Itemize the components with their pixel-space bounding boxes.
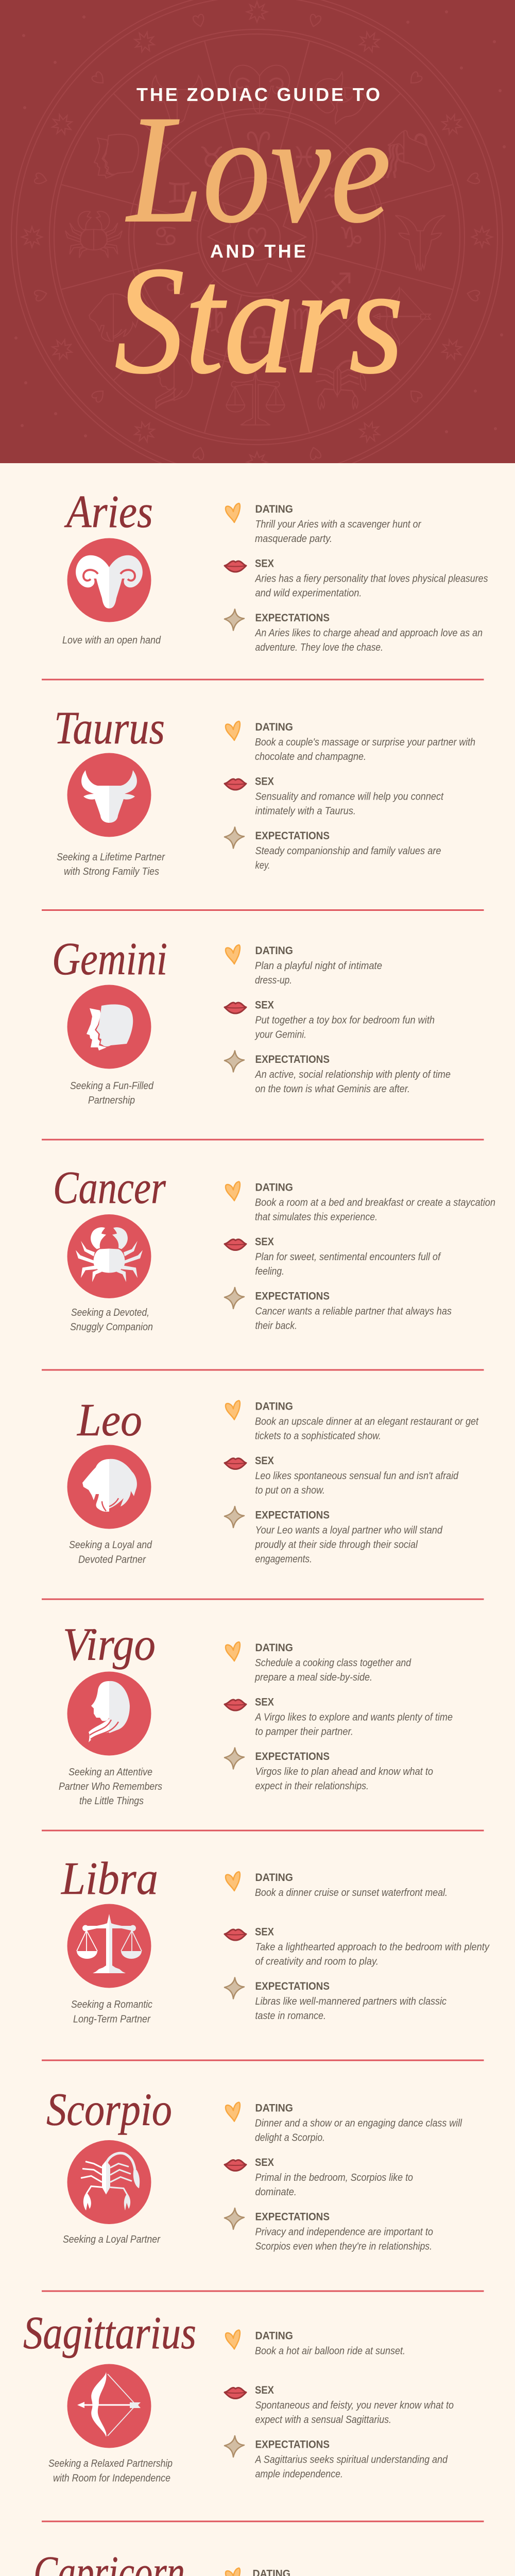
sex block: SEX (255, 1926, 274, 1938)
caption (70, 1307, 153, 1333)
expectations block: Cancer wants a reliable partner that always has (255, 1306, 452, 1317)
caption (71, 1998, 153, 2025)
dating block: Book a dinner cruise or sunset waterfront meal. (255, 1887, 448, 1899)
sex block (225, 2157, 413, 2198)
dating block: chocolate and champagne. (255, 751, 366, 762)
dating block: prepare a meal side-by-side. (254, 1671, 372, 1683)
expectations block: Steady companionship and family values are (255, 845, 441, 857)
caption: Seeking a Fun-Filled (70, 1080, 154, 1092)
dating block (226, 503, 422, 545)
caption: with Strong Family Ties (64, 866, 159, 877)
expectations block: taste in romance. (255, 2010, 326, 2022)
sex block (225, 1455, 459, 1496)
dating block: Book a couple's massage or surprise your partner with (255, 736, 475, 748)
panel: header: ♍ (199, 301, 225, 335)
expectations block: EXPECTATIONS (255, 1290, 330, 1302)
sign name: Gemini (52, 934, 167, 985)
expectations block: proudly at their side through their social (255, 1538, 418, 1551)
panel: header: ♒ (322, 177, 348, 210)
caption: Seeking a Relaxed Partnership (48, 2458, 173, 2469)
title word: Love: Love (125, 83, 391, 255)
sex block: your Gemini. (254, 1028, 306, 1041)
dating block: dress-up. (255, 974, 292, 986)
expectations block: their back. (255, 1320, 297, 1331)
dating block: DATING (255, 945, 293, 957)
caption: Seeking a Loyal Partner (63, 2233, 161, 2245)
sign name: Leo (76, 1395, 142, 1446)
expectations block: EXPECTATIONS (255, 1054, 330, 1065)
expectations block: EXPECTATIONS (255, 1510, 330, 1521)
caption: Snuggly Companion (70, 1321, 153, 1333)
sex block: Put together a toy box for bedroom fun with (255, 1014, 435, 1026)
panel: header: ♏ (291, 303, 317, 336)
expectations block: EXPECTATIONS (255, 1751, 330, 1762)
expectations block: expect in their relationships. (255, 1780, 369, 1792)
caption (57, 851, 165, 877)
caption: Long-Term Partner (73, 2013, 151, 2025)
caption: with Room for Independence (53, 2472, 170, 2484)
panel: Libra (60, 1853, 490, 2025)
dating block (226, 2102, 462, 2143)
sex block (225, 1926, 490, 1967)
panel: header: ♐ (327, 267, 353, 301)
sex block: SEX (255, 557, 274, 570)
panel: Taurus (54, 703, 475, 877)
expectations block (225, 1977, 447, 2022)
caption: Seeking a Romantic (71, 1998, 153, 2010)
sex block (225, 776, 444, 817)
dating block (226, 1872, 448, 1899)
panel: header: ♉ (199, 141, 225, 175)
caption (70, 1080, 154, 1106)
expectations block: EXPECTATIONS (255, 612, 330, 624)
dating block: that simulates this experience. (255, 1211, 377, 1223)
sign name: Cancer (53, 1162, 166, 1213)
icon: crab (67, 1214, 151, 1298)
dating block: DATING (255, 1182, 293, 1193)
sex block: SEX (255, 776, 274, 787)
panel: header: ♌ (163, 269, 188, 302)
expectations block (225, 827, 441, 871)
panel: Virgo (59, 1619, 453, 1807)
panel: Sagittarius (23, 2308, 454, 2484)
sign name: Libra (60, 1853, 158, 1904)
sex block: Plan for sweet, sentimental encounters full of (255, 1251, 441, 1263)
expectations block: EXPECTATIONS (255, 2211, 330, 2223)
expectations block: EXPECTATIONS (255, 1980, 330, 1992)
sex block: A Virgo likes to explore and wants plenty of time (254, 1711, 453, 1723)
sex block: feeling. (255, 1265, 284, 1277)
expectations block: An Aries likes to charge ahead and approach love as an (254, 627, 483, 639)
panel: header: ♓ (291, 141, 317, 175)
sex block (225, 557, 488, 599)
panel: header: ♈ (246, 126, 271, 160)
panel: header: ♋ (153, 220, 179, 253)
dating block: DATING (255, 1642, 293, 1654)
expectations block: Virgos like to plan ahead and know what to (255, 1766, 433, 1777)
sex block: SEX (255, 2157, 274, 2168)
expectations block: Privacy and independence are important to (255, 2226, 433, 2238)
sign name: Sagittarius (23, 2308, 196, 2359)
expectations block (225, 2208, 433, 2252)
icon: ram (67, 538, 151, 622)
panel: Cancer (53, 1162, 495, 1333)
caption: Partnership (88, 1094, 135, 1106)
dating block (226, 2568, 466, 2576)
caption: Partner Who Remembers (59, 1781, 162, 1792)
sex block: and wild experimentation. (255, 587, 362, 599)
sex block: dominate. (255, 2186, 297, 2198)
sex block: SEX (255, 1455, 274, 1467)
panel: header: ♊ (166, 177, 192, 210)
expectations block: key. (255, 859, 270, 871)
sex block (225, 1236, 441, 1277)
sex block: Sensuality and romance will help you connect (255, 790, 444, 803)
panel: header: ♑ (338, 221, 364, 255)
dating block: Thrill your Aries with a scavenger hunt or (255, 518, 422, 530)
expectations block: on the town is what Geminis are after. (255, 1083, 410, 1095)
caption: Seeking an Attentive (68, 1766, 152, 1778)
dating block: DATING (255, 2330, 293, 2342)
dating block: DATING (255, 2102, 293, 2114)
expectations block: adventure. They love the chase. (255, 641, 383, 653)
sex block: intimately with a Taurus. (255, 805, 356, 817)
icon: scorpion (67, 2140, 151, 2224)
panel: header: ♎ (247, 319, 272, 352)
sex block: Spontaneous and feisty, you never know what to (255, 2399, 454, 2411)
panel: Gemini (52, 934, 451, 1106)
panel: Leo (67, 1395, 479, 1565)
expectations block: ample independence. (255, 2468, 343, 2480)
dating block: DATING (255, 503, 293, 515)
caption: the Little Things (79, 1795, 144, 1807)
expectations block (225, 2436, 448, 2480)
caption (59, 1766, 162, 1807)
sign name: Virgo (63, 1619, 156, 1670)
caption (48, 2458, 173, 2484)
expectations block (225, 1287, 452, 1331)
sex block (225, 1696, 453, 1737)
expectations block: A Sagittarius seeks spiritual understanding and (254, 2453, 448, 2466)
sex block: Take a lighthearted approach to the bedroom with plenty (255, 1941, 490, 1953)
expectations block: Libras like well-mannered partners with classic (255, 1995, 447, 2007)
title line: and the: AND THE (210, 241, 306, 262)
icon: bow and arrow (67, 2364, 151, 2448)
dating block (226, 721, 475, 762)
panel: Capricorn (33, 2547, 472, 2576)
panel: Scorpio (46, 2084, 462, 2252)
sex block: expect with a sensual Sagittarius. (255, 2414, 391, 2426)
sex block: of creativity and room to play. (255, 1956, 379, 1967)
sex block: SEX (255, 999, 274, 1011)
sign name: Aries (64, 486, 153, 537)
expectations block: Your Leo wants a loyal partner who will stand (255, 1524, 443, 1536)
dating block: Schedule a cooking class together and (255, 1657, 411, 1669)
dating block (226, 2330, 405, 2357)
expectations block: EXPECTATIONS (255, 830, 330, 842)
dating block: Book an upscale dinner at an elegant restaurant or get (255, 1416, 479, 1427)
dating block (226, 945, 382, 986)
sex block: to pamper their partner. (255, 1726, 353, 1737)
expectations block: Scorpios even when they're in relationships. (255, 2240, 432, 2252)
icon: twins (67, 985, 151, 1069)
panel: Aries (62, 486, 488, 653)
dating block: Dinner and a show or an engaging dance class will (255, 2117, 462, 2129)
sex block: to put on a show. (255, 1484, 325, 1496)
sex block: Leo likes spontaneous sensual fun and isn't afraid (255, 1470, 459, 1482)
sex block: SEX (255, 1696, 274, 1708)
caption: Devoted Partner (78, 1554, 146, 1565)
sign name: Scorpio (46, 2084, 172, 2135)
caption (69, 1539, 152, 1565)
dating block (226, 1642, 411, 1683)
expectations block: engagements. (255, 1553, 312, 1565)
icon: lion (67, 1445, 151, 1529)
title line: the zodiac guide to: THE ZODIAC GUIDE TO (136, 84, 380, 105)
sex block (225, 2384, 454, 2426)
sex block: Aries has a fiery personality that loves physical pleasures (254, 573, 488, 584)
caption: Love with an open hand (62, 634, 161, 646)
dating block: tickets to a sophisticated show. (255, 1430, 381, 1442)
expectations block (225, 1506, 443, 1565)
expectations block (225, 609, 483, 653)
sex block (225, 999, 435, 1041)
dating block (226, 1400, 479, 1442)
dating block: masquerade party. (255, 533, 332, 545)
dating block: Book a hot air balloon ride at sunset. (255, 2345, 405, 2357)
sex block: SEX (255, 1236, 274, 1248)
dating block: DATING (255, 1872, 293, 1884)
sex block: Primal in the bedroom, Scorpios like to (255, 2172, 413, 2183)
panel: header (0, 0, 515, 483)
icon: scales (67, 1904, 151, 1988)
dating block: DATING (255, 721, 293, 733)
dating block: Plan a playful night of intimate (255, 960, 382, 972)
dating block (226, 1182, 495, 1223)
expectations block: An active, social relationship with plenty of time (254, 1069, 451, 1080)
caption: Seeking a Loyal and (69, 1539, 152, 1551)
icon: bull (67, 753, 151, 837)
expectations block (225, 1051, 451, 1095)
dating block: delight a Scorpio. (255, 2132, 325, 2143)
caption: Seeking a Lifetime Partner (57, 851, 165, 863)
expectations block: EXPECTATIONS (255, 2439, 330, 2450)
icon: maiden (67, 1671, 151, 1756)
sign name: Taurus (54, 703, 165, 754)
sex block: SEX (255, 2384, 274, 2396)
title word: Stars: Stars (114, 234, 404, 405)
caption: Seeking a Devoted, (71, 1307, 149, 1318)
expectations block (225, 1748, 433, 1792)
dating block: DATING (255, 1400, 293, 1413)
